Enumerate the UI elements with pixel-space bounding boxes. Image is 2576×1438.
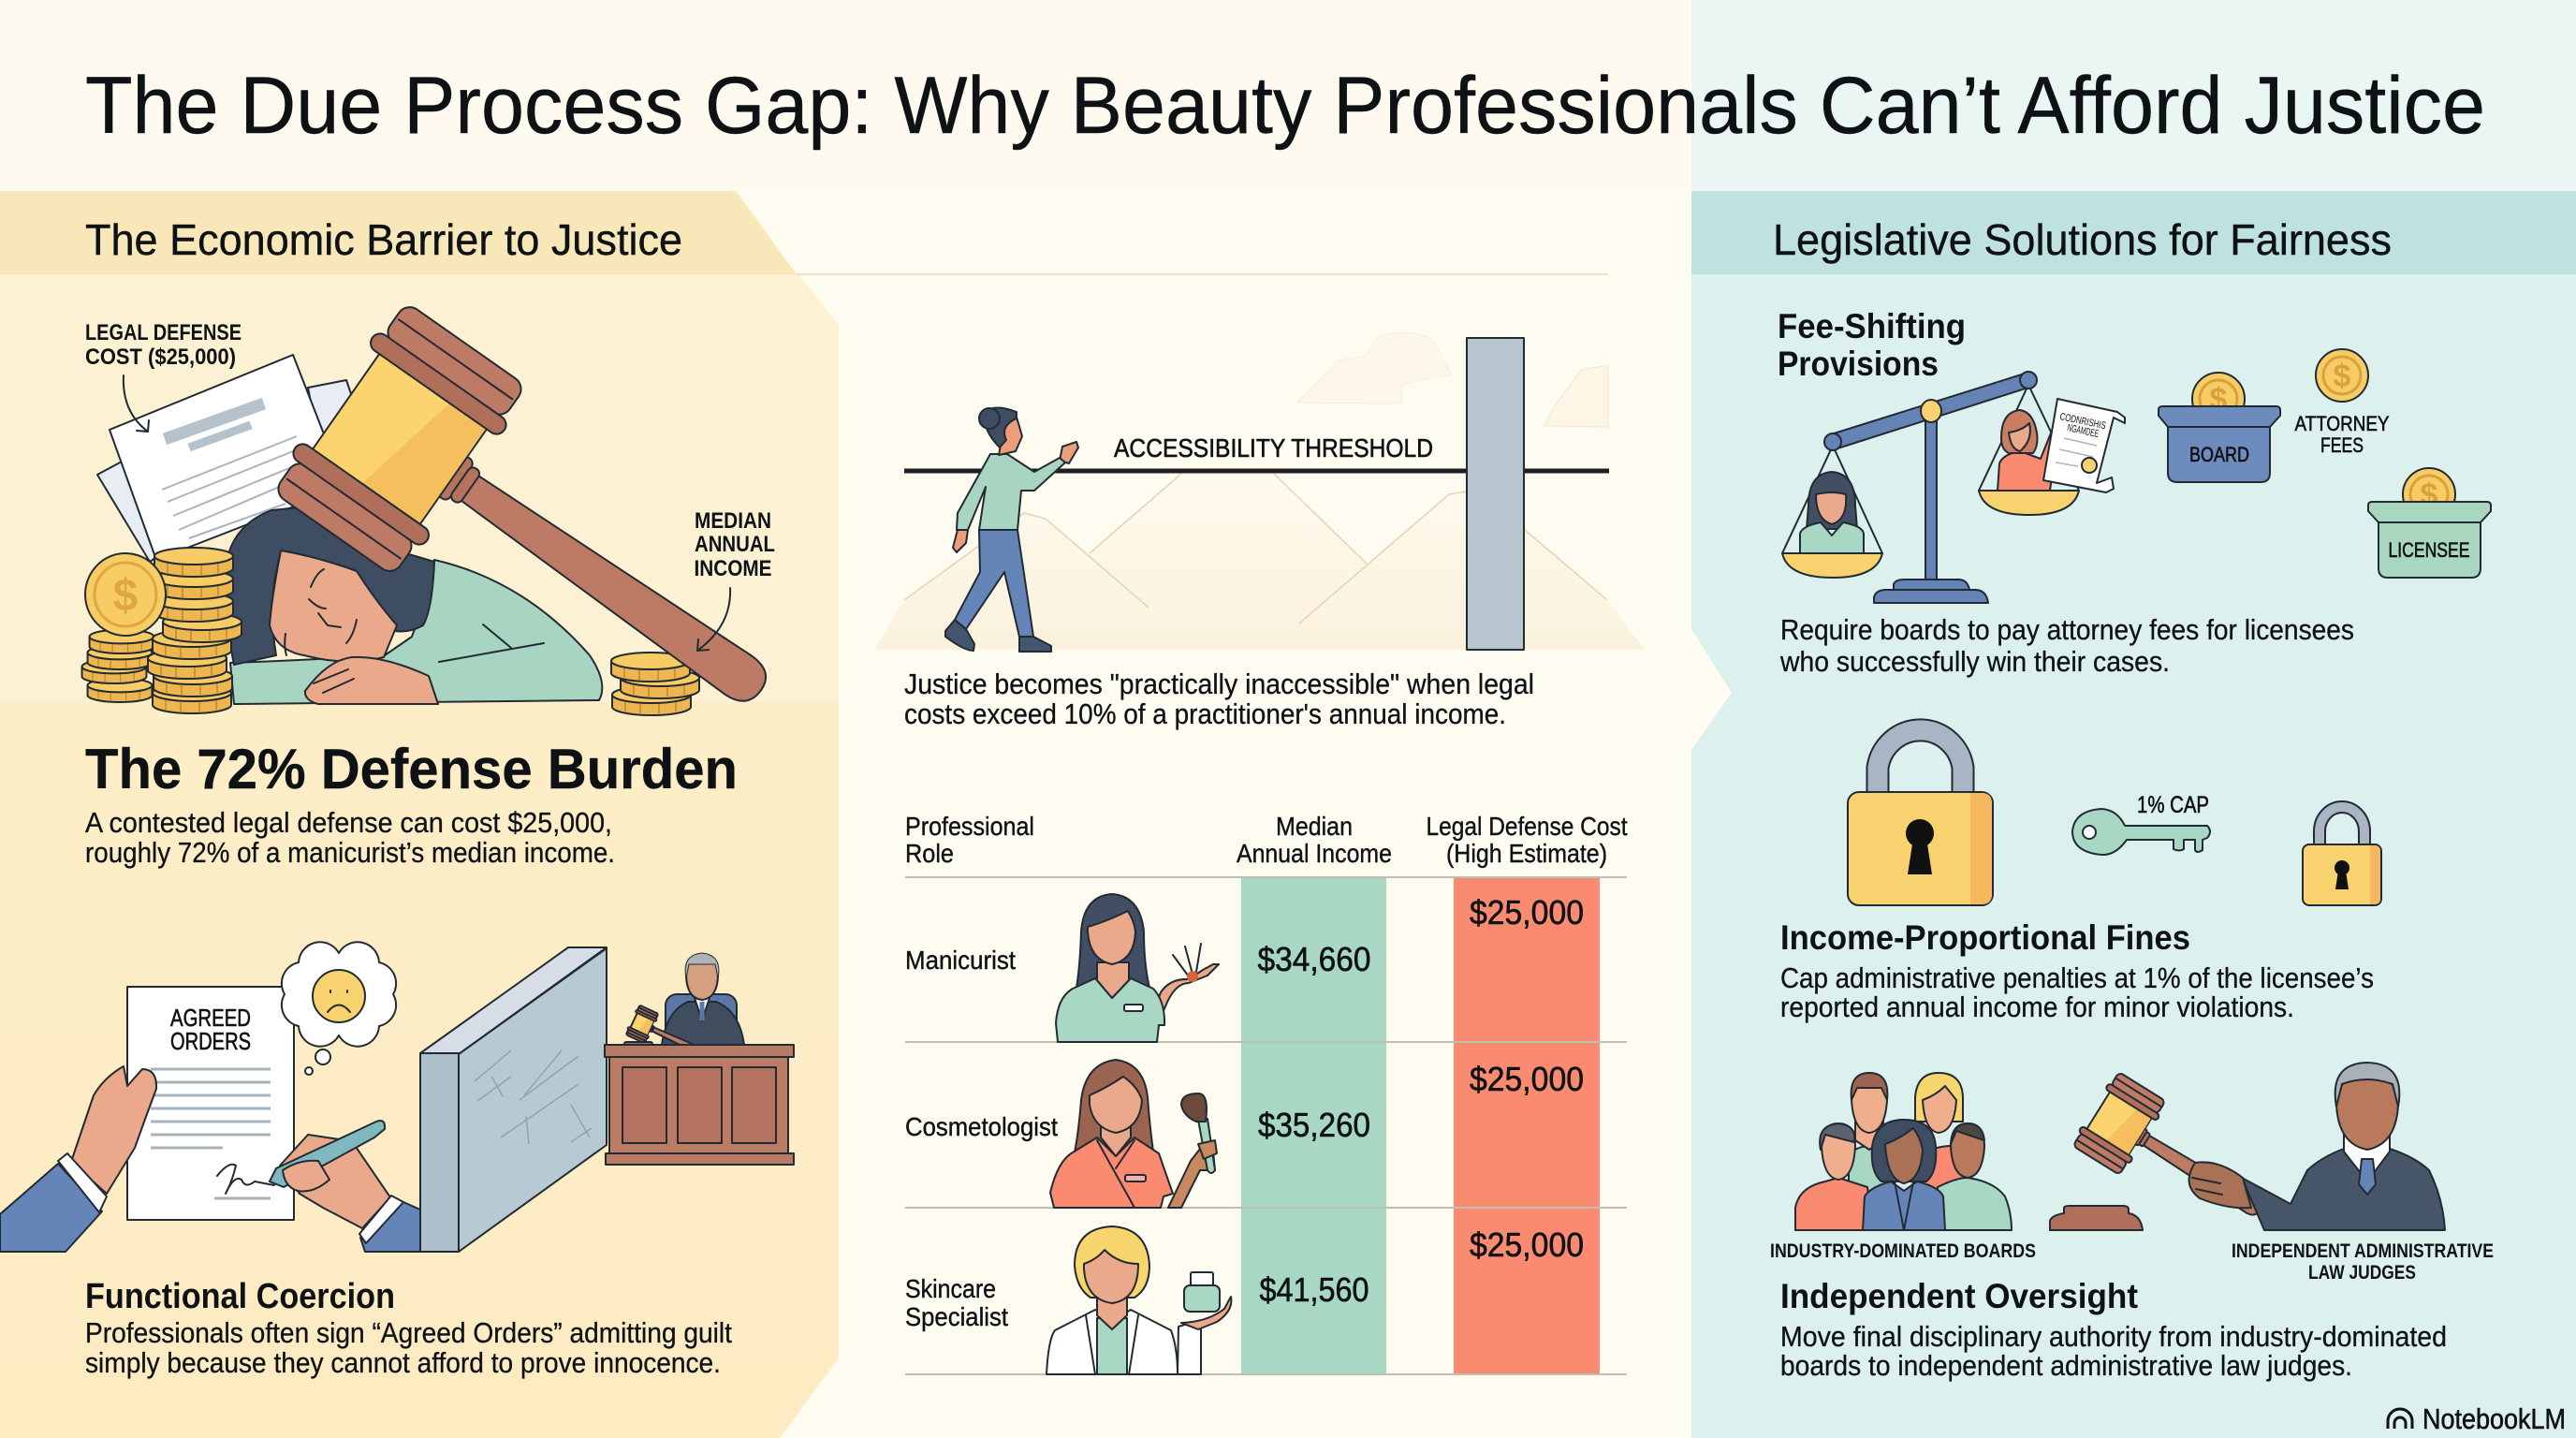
text block: functional coercion: Professionals often sign “Agreed Orders” admitting guilt (85, 1316, 732, 1349)
icon: big padlock (1848, 730, 1993, 905)
icon: board box with coin (2159, 373, 2280, 482)
text block: independent oversight: boards to independent administrative law judges. (1780, 1349, 2352, 1382)
text block: income-proportional fines: Cap administrative penalties at 1% of the licensee’s (1780, 961, 2374, 994)
icon: thought bubble with sad face (282, 942, 396, 1075)
text block: 72% defense burden: A contested legal defense can cost $25,000, (85, 806, 612, 839)
scale left pan with manicurist (1782, 446, 1882, 578)
icon: attorney fees coin (2316, 349, 2368, 402)
row: skincare specialist (905, 1225, 1584, 1374)
icon: agreed orders document: AGREED (170, 1004, 251, 1032)
icon: left hand holding document (0, 1066, 156, 1252)
icon: 1% cap key (2072, 792, 2210, 855)
heading band: legislative solutions: Legislative Solutions for Fairness (1773, 215, 2392, 264)
heading: fee-shifting provisions (1778, 307, 1966, 383)
row: cosmetologist: $35,260 (1258, 1106, 1370, 1144)
text block: independent oversight (1780, 1277, 2447, 1382)
icon: board box with coin: BOARD (2189, 443, 2249, 466)
table header: Legal Defense Cost (1427, 812, 1628, 841)
heading: fee-shifting provisions: Fee-Shifting (1778, 307, 1966, 345)
row: manicurist: Manicurist (905, 946, 1016, 975)
label: attorney fees: FEES (2320, 433, 2364, 457)
row: skincare specialist: Specialist (905, 1302, 1008, 1331)
label: median annual income (695, 508, 775, 581)
heading: fee-shifting provisions: Provisions (1778, 345, 1939, 383)
text block: income-proportional fines: Income-Proportional Fines (1780, 918, 2190, 957)
row: cosmetologist: Cosmetologist (905, 1112, 1058, 1141)
text block: income-proportional fines: reported annual income for minor violations. (1780, 990, 2294, 1023)
scale beam (1824, 372, 2037, 450)
background: hills and clouds (874, 332, 1645, 650)
label: attorney fees (2295, 412, 2390, 457)
table header (905, 812, 1628, 868)
panel: right solutions background (1691, 191, 2576, 1438)
illustration: balance scale (1782, 372, 2125, 603)
label: independent administrative law judges: LAW JUDGES (2308, 1262, 2416, 1284)
icon: 1% cap key: 1% CAP (2137, 792, 2209, 818)
text block: functional coercion: Functional Coercion (85, 1277, 395, 1316)
text block: 72% defense burden: The 72% Defense Burden (85, 738, 738, 800)
label: median annual income: INCOME (695, 556, 771, 581)
icon: licensee box with coin: LICENSEE (2389, 538, 2469, 562)
label: industry-dominated boards: INDUSTRY-DOMINATED BOARDS (1770, 1240, 2036, 1262)
icon: small padlock (2303, 807, 2381, 905)
row: manicurist (905, 893, 1584, 1042)
figure: exhausted woman (226, 506, 602, 704)
icon: wall barrier (420, 947, 607, 1252)
icon: left coin stacks: $ (113, 571, 139, 621)
text block: 72% defense burden (85, 738, 738, 869)
row: cosmetologist: $25,000 (1470, 1060, 1584, 1098)
text block: independent oversight: Move final disciplinary authority from industry-dominated (1780, 1320, 2447, 1353)
text block: independent oversight: Independent Oversight (1780, 1277, 2138, 1315)
scale stand (1874, 418, 1988, 603)
icon: left coin stacks (82, 548, 242, 713)
scale right pan with professional and certificate (1979, 385, 2125, 515)
row: manicurist: $34,660 (1258, 940, 1370, 978)
text block: 72% defense burden: roughly 72% of a manicurist’s median income. (85, 836, 615, 869)
illustration: accessibility threshold (874, 332, 1645, 652)
column: legal defense cost bar (1454, 877, 1600, 1374)
label: attorney fees: ATTORNEY (2295, 412, 2390, 435)
table header: Professional (905, 812, 1034, 841)
arrow: to coins (697, 588, 730, 651)
illustration: industry-dominated board group (1795, 1073, 2012, 1230)
table: income vs legal defense cost (905, 812, 1628, 1374)
arrow: to legal documents (124, 375, 149, 432)
text block: fee shifting description: Require boards to pay attorney fees for licensees (1780, 613, 2354, 646)
row: cosmetologist (905, 1060, 1584, 1208)
table header: (High Estimate) (1446, 839, 1607, 868)
icon: skincare specialist portrait (1046, 1226, 1231, 1374)
icon: right hand signing with pen (270, 1121, 420, 1252)
barrier column (1467, 338, 1524, 650)
center divider rule (797, 273, 1608, 275)
scale right pan with professional and certificate: NGAMDEE (2066, 422, 2100, 440)
label: legal defense cost (85, 320, 242, 370)
threshold line (904, 468, 1609, 474)
table header: Median (1276, 812, 1353, 841)
text block: practically inaccessible (904, 668, 1534, 730)
icon: manicurist portrait (1056, 894, 1219, 1042)
row: skincare specialist: $25,000 (1470, 1225, 1584, 1264)
icon: licensee box with coin (2368, 468, 2491, 578)
label: legal defense cost: COST ($25,000) (85, 345, 236, 370)
label: independent administrative law judges (2232, 1240, 2494, 1284)
text block: practically inaccessible: Justice becomes "practically inaccessible" when legal (904, 668, 1534, 700)
title: The Due Process Gap: Why Beauty Professionals Can’t Afford Justice (85, 61, 2485, 151)
table header: Role (905, 839, 954, 868)
icon: agreed orders document (127, 987, 294, 1220)
column: median income bar (1241, 877, 1386, 1374)
figure: woman reaching threshold (945, 407, 1078, 652)
text block: practically inaccessible: costs exceed 10% of a practitioner's annual income. (904, 697, 1506, 730)
label: independent administrative law judges: INDEPENDENT ADMINISTRATIVE (2232, 1240, 2494, 1262)
row: manicurist: $25,000 (1470, 893, 1584, 932)
table rules (905, 877, 1627, 1374)
table header: Annual Income (1237, 839, 1392, 868)
text block: functional coercion (85, 1277, 732, 1379)
row: skincare specialist: Skincare (905, 1274, 996, 1303)
heading band: economic barrier: The Economic Barrier to Justice (85, 215, 682, 264)
icon: legal documents (97, 355, 360, 562)
heading band: economic barrier (0, 191, 797, 274)
icon: right coin stack (611, 653, 699, 715)
heading band: legislative solutions (1691, 191, 2576, 274)
label: median annual income: MEDIAN (695, 508, 771, 534)
icon: giant gavel (267, 298, 827, 786)
text block: functional coercion: simply because they cannot afford to prove innocence. (85, 1346, 721, 1379)
figure: administrative law judge (2189, 1063, 2445, 1230)
text block: fee shifting description: who successfully win their cases. (1779, 645, 2170, 678)
label: median annual income: ANNUAL (695, 532, 775, 557)
icon: gavel and sound block (2050, 1070, 2282, 1248)
label: legal defense cost: LEGAL DEFENSE (85, 320, 242, 345)
illustration: woman crushed by gavel (82, 298, 827, 786)
panel: left barrier background (0, 274, 839, 1438)
scale right pan with professional and certificate: CODNRISHIS (2058, 411, 2107, 432)
text block: fee shifting description (1779, 613, 2354, 678)
icon: cosmetologist portrait (1050, 1060, 1217, 1208)
icon: agreed orders document: ORDERS (170, 1027, 251, 1055)
label: accessibility threshold: ACCESSIBILITY THRESHOLD (1114, 433, 1433, 462)
text block: income-proportional fines (1780, 918, 2374, 1023)
icon: judge at bench (605, 953, 794, 1165)
illustration: signing agreed orders before wall and judge (0, 942, 794, 1252)
row: skincare specialist: $41,560 (1260, 1270, 1368, 1309)
